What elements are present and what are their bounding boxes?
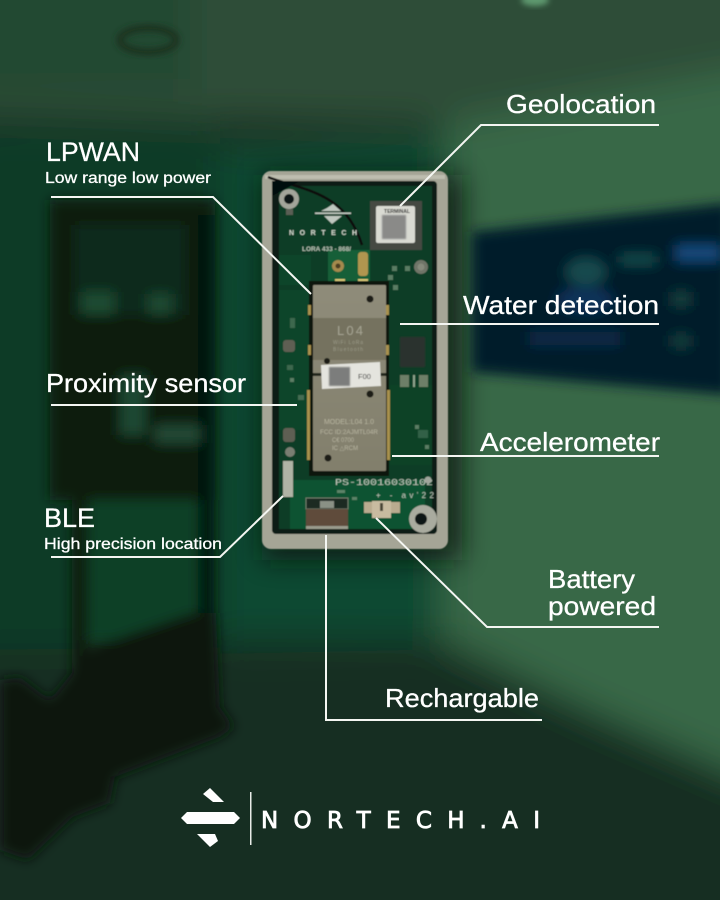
wireless module: Bluetooth [333,347,363,353]
blurred ceiling lamp [120,28,176,52]
label: Proximity sensor: Proximity sensor [46,368,246,398]
label: Rechargable: Rechargable [385,683,539,713]
silkscreen specks [287,266,429,500]
blurred shelf [0,200,234,860]
label: BLE: BLE [44,503,95,533]
wireless module: FCC ID:2AJMTL04R [320,430,379,436]
label sticker: F00 [358,372,371,381]
GPS module [370,201,422,250]
device enclosure [262,171,448,549]
wireless module: MODEL:L04 1.0 [324,419,374,426]
wireless module: IC △RCM [332,446,358,452]
wireless module [307,281,390,476]
pcb text: NORTECH [289,230,357,237]
label: LPWAN: Low range low power [45,170,212,187]
logo wordmark: NORTECH.AI [261,808,540,834]
circuit board: + - av'22 [376,491,435,500]
label: LPWAN: LPWAN [46,137,140,167]
circuit board: LORA 433 - 868/ [302,246,351,253]
label sticker [321,362,381,389]
label: BLE: High precision location [44,536,222,553]
GPS module: TERMINAL [384,209,410,215]
label: Geolocation: Geolocation [506,89,656,119]
accelerometer and water sensor chips [400,337,425,367]
battery connector [364,501,400,518]
label: Accelerometer: Accelerometer [480,427,660,457]
label: Battery powered [548,564,656,621]
callout lines [51,125,659,720]
logo [181,788,540,847]
label: Water detection: Water detection [463,290,659,320]
label: Battery powered: powered [548,591,656,621]
label: Battery powered: Battery [548,564,635,594]
circuit board [268,177,437,533]
label: BLE [44,503,222,553]
usb connector [306,498,348,529]
wireless module: L04 [337,323,363,338]
wireless module: C€ 0700 [332,438,355,444]
circuit board: PS-10016030102 [335,478,433,488]
label: LPWAN [45,137,212,187]
blurred wall screen [472,203,720,395]
device drop shadow [262,175,462,560]
wireless module: WiFi LoRa [333,340,363,346]
logo mark [181,788,240,847]
blurred ceiling light [521,0,549,6]
